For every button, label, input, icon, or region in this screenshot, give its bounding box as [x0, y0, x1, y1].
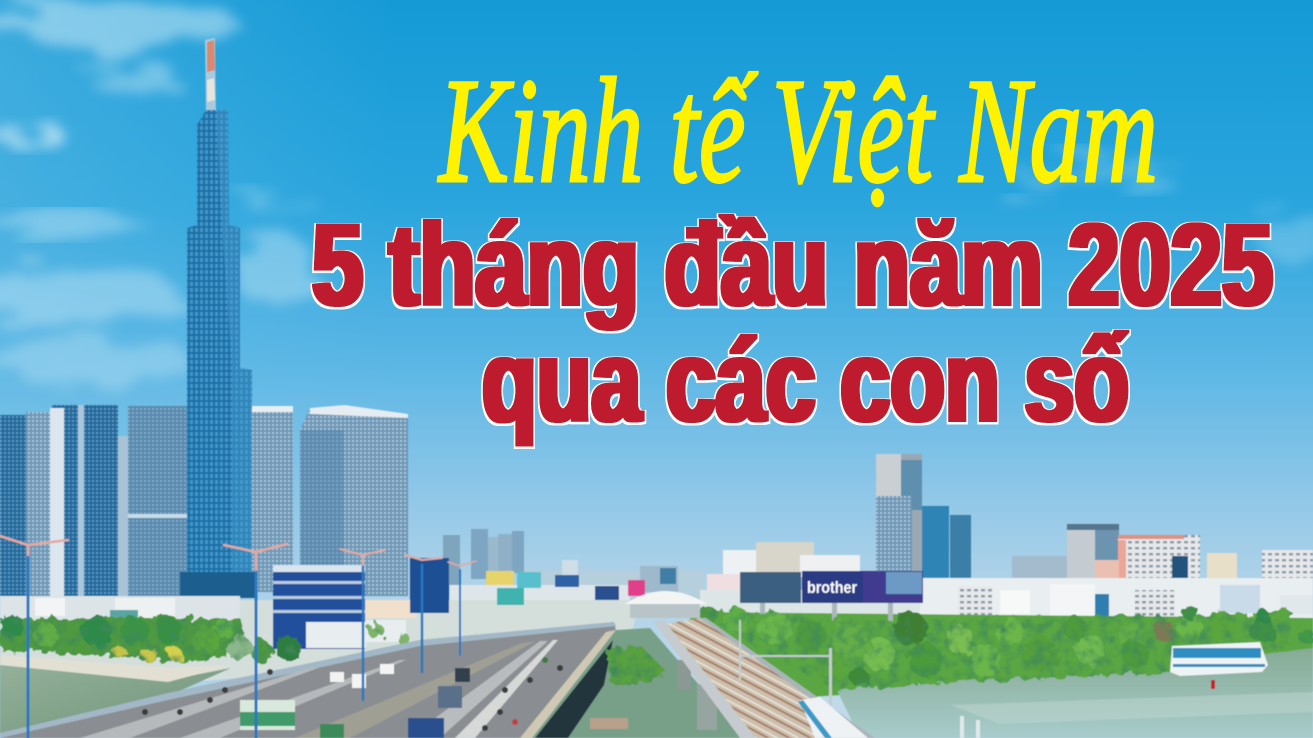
right river	[836, 648, 1313, 738]
ground behind left district	[0, 600, 640, 700]
clouds	[0, 3, 1313, 384]
blue office building	[273, 565, 366, 649]
left residential towers	[0, 405, 408, 600]
metro viaduct	[654, 618, 980, 738]
heading line: qua các con số: qua các con số	[482, 315, 1129, 446]
distant skyline	[443, 529, 704, 625]
low-rise buildings right	[700, 578, 1313, 624]
left billboards	[410, 558, 645, 613]
vehicles on highway	[142, 657, 563, 738]
left river and embankment	[0, 655, 232, 738]
tree band right	[699, 604, 1313, 690]
ground under right trees	[690, 612, 1313, 700]
highway bridge	[0, 622, 616, 738]
low white villas left	[0, 596, 416, 642]
landmark tower	[180, 38, 255, 598]
billboard legs	[760, 603, 893, 643]
billboards right: brother	[807, 578, 857, 597]
right city skyline	[660, 454, 1313, 606]
middle river	[532, 628, 745, 738]
metro station dome	[625, 591, 707, 618]
tourist boat	[1170, 642, 1268, 689]
street lamps	[0, 536, 476, 738]
trees left	[0, 614, 411, 663]
billboards right	[740, 571, 923, 603]
